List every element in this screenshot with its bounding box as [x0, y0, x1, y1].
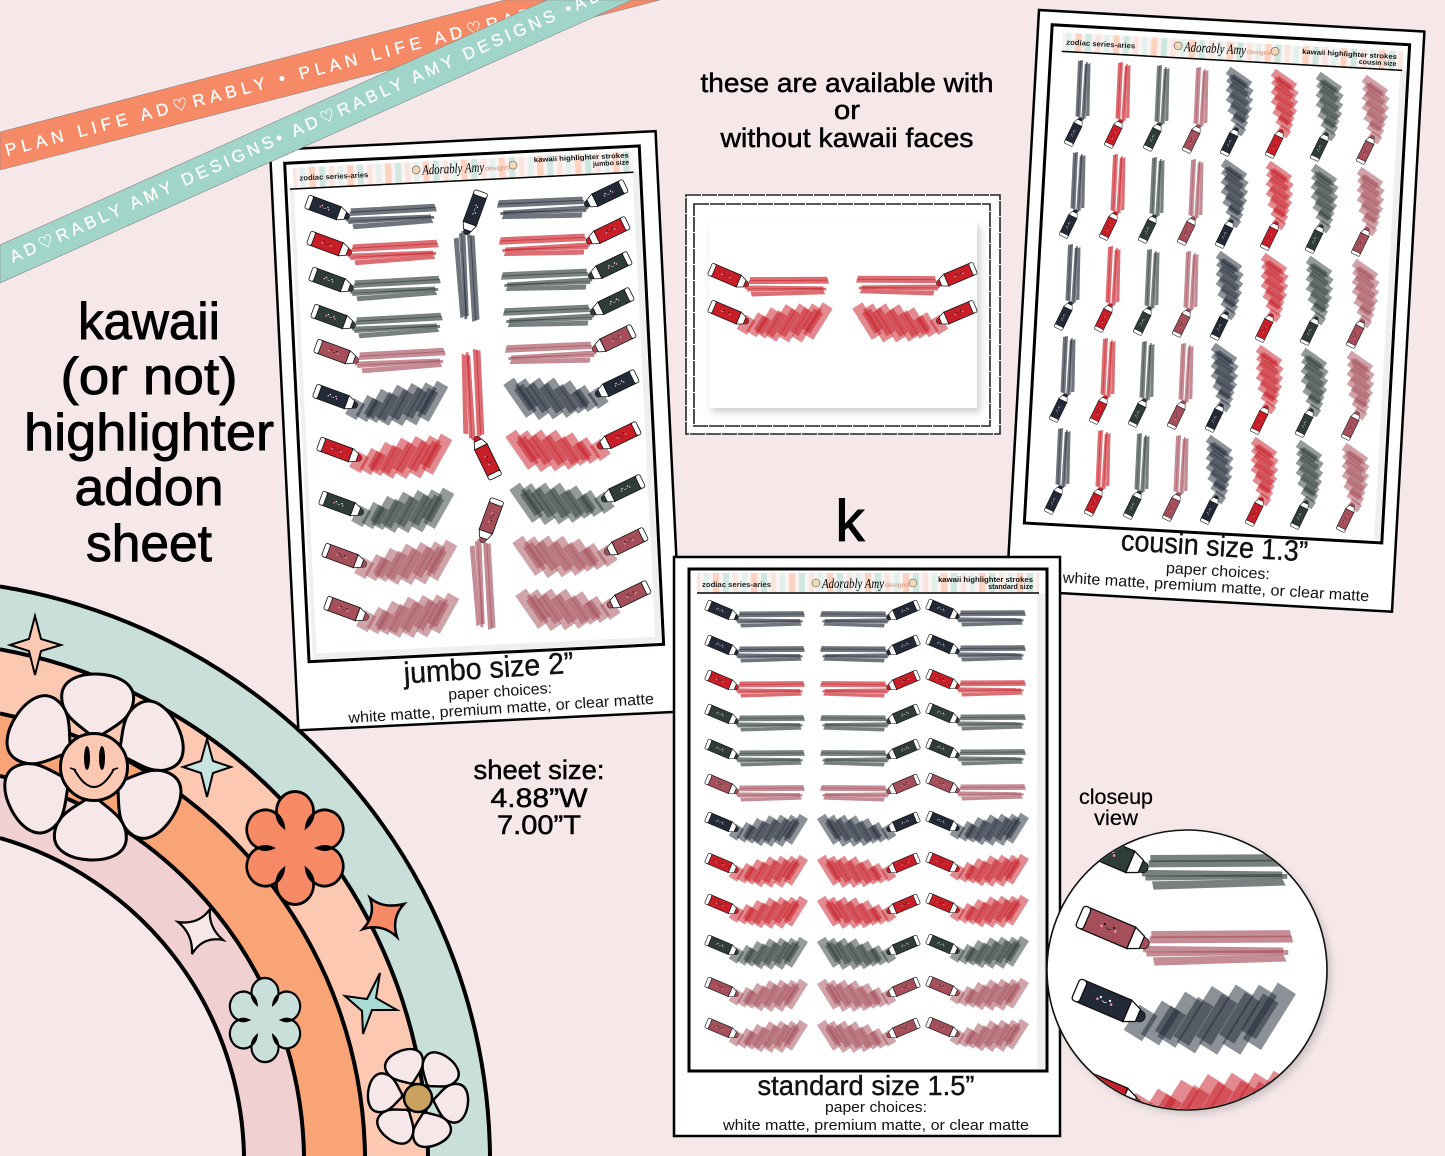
sample sticker shadow — [712, 226, 980, 412]
title: (or not) — [60, 348, 238, 406]
standard right column — [925, 599, 1029, 1052]
sample outer border — [686, 195, 1000, 434]
title: highlighter — [24, 404, 274, 462]
caption: cousin size — [1061, 522, 1373, 605]
sheet paper and frame: designs — [1247, 50, 1271, 57]
text: closeup view: closeup — [1079, 786, 1153, 809]
icon: teal sparkle — [183, 739, 231, 797]
circle shadow — [1051, 834, 1331, 1114]
caption: jumbo size — [344, 642, 654, 727]
text: closeup view — [1079, 786, 1153, 830]
sample sticker sheet — [709, 221, 977, 408]
icon: coral flower — [247, 792, 343, 904]
cousin row 3 — [1054, 243, 1381, 350]
title: kawaii — [78, 293, 220, 351]
circle lens — [1047, 830, 1327, 1110]
text: sheet size: 4.88”W — [490, 783, 588, 813]
title — [24, 293, 274, 573]
icon: teal star — [345, 973, 397, 1034]
sheet paper and frame: kawaii highlighter strokes — [534, 152, 629, 164]
sheet paper and frame: jumbo size — [592, 159, 629, 168]
jumbo left column strokes — [304, 189, 461, 642]
sample inner border — [694, 204, 990, 426]
caption: jumbo size: paper choices: — [448, 680, 553, 704]
text: availability note: or — [834, 95, 860, 125]
text: availability note: these are available with — [700, 68, 994, 98]
icon: coral star — [363, 898, 404, 937]
sheet paper and frame: Adorably Amy — [1183, 40, 1247, 59]
sheet paper and frame — [1007, 10, 1424, 612]
cousin row 1 — [1064, 59, 1391, 166]
jumbo right column strokes — [496, 179, 653, 633]
caption: standard size: white matte, premium matte, or clear matte — [722, 1117, 1029, 1134]
sheet paper and frame: designs — [485, 165, 509, 173]
caption: standard size: paper choices: — [825, 1099, 927, 1116]
sheet paper and frame: cousin size — [1359, 59, 1397, 68]
text: closeup view: view — [1094, 807, 1139, 830]
sheet paper and frame: zodiac series-aries — [1066, 38, 1135, 50]
icon: white daisy — [366, 1044, 470, 1152]
caption: cousin size: white matte, premium matte, or clear matte — [1061, 570, 1370, 605]
caption: standard size — [722, 1070, 1029, 1134]
caption: jumbo size: white matte, premium matte, or clear matte — [347, 691, 654, 727]
panel: standard size sheet — [674, 557, 1060, 1136]
caption: standard size: standard size 1.5” — [758, 1070, 974, 1101]
title: addon — [74, 459, 224, 517]
rainbow — [0, 586, 490, 1156]
text: sheet size: 7.00”T — [497, 810, 581, 840]
caption: cousin size: cousin size 1.3” — [1120, 525, 1309, 568]
panel: with or without faces sample — [686, 195, 1000, 434]
caption: jumbo size: jumbo size 2” — [402, 647, 575, 690]
text: sheet size — [474, 755, 604, 840]
sheet paper and frame: zodiac series-aries — [702, 580, 771, 589]
icon: white star — [178, 909, 223, 954]
sheet paper and frame: standard size — [988, 584, 1033, 591]
text: availability note: without kawaii faces — [719, 123, 974, 153]
icon: peach sparkle — [10, 616, 61, 675]
sheet paper and frame — [674, 557, 1060, 1136]
panel: cousin size sheet — [1007, 10, 1424, 612]
ribbon: plan life adorably: PLAN LIFE AD♡RABLY • PLAN LIFE AD♡RAB — [3, 5, 533, 160]
sheet paper and frame — [270, 131, 684, 730]
icon: smiley flower — [0, 672, 193, 862]
jumbo vertical strokes — [451, 189, 511, 631]
sheet paper and frame: designs — [885, 583, 909, 589]
sheet paper and frame: Adorably Amy — [821, 577, 885, 592]
sheet paper and frame: Adorably Amy — [421, 161, 485, 179]
rainbow bands — [0, 586, 490, 1156]
standard left column — [704, 600, 808, 1053]
magnified strokes — [1072, 846, 1296, 1109]
title: sheet — [86, 515, 213, 573]
text: letter k: k — [836, 489, 866, 554]
cousin row 2 — [1059, 151, 1386, 258]
standard middle column — [817, 600, 921, 1053]
sheet paper and frame: kawaii highlighter strokes — [1302, 49, 1397, 61]
sheet paper and frame: zodiac series-aries — [299, 170, 369, 183]
text: sheet size: sheet size: — [474, 755, 604, 785]
sample red strokes — [707, 262, 978, 342]
text: availability note — [700, 68, 994, 153]
cousin row 5 — [1044, 427, 1371, 534]
sheet paper and frame: kawaii highlighter strokes — [938, 577, 1033, 584]
cousin row 4 — [1049, 335, 1376, 442]
closeup circle — [1047, 829, 1331, 1143]
icon: teal flower — [230, 978, 300, 1062]
caption: cousin size: paper choices: — [1165, 560, 1270, 583]
panel: jumbo size sheet — [270, 131, 684, 730]
